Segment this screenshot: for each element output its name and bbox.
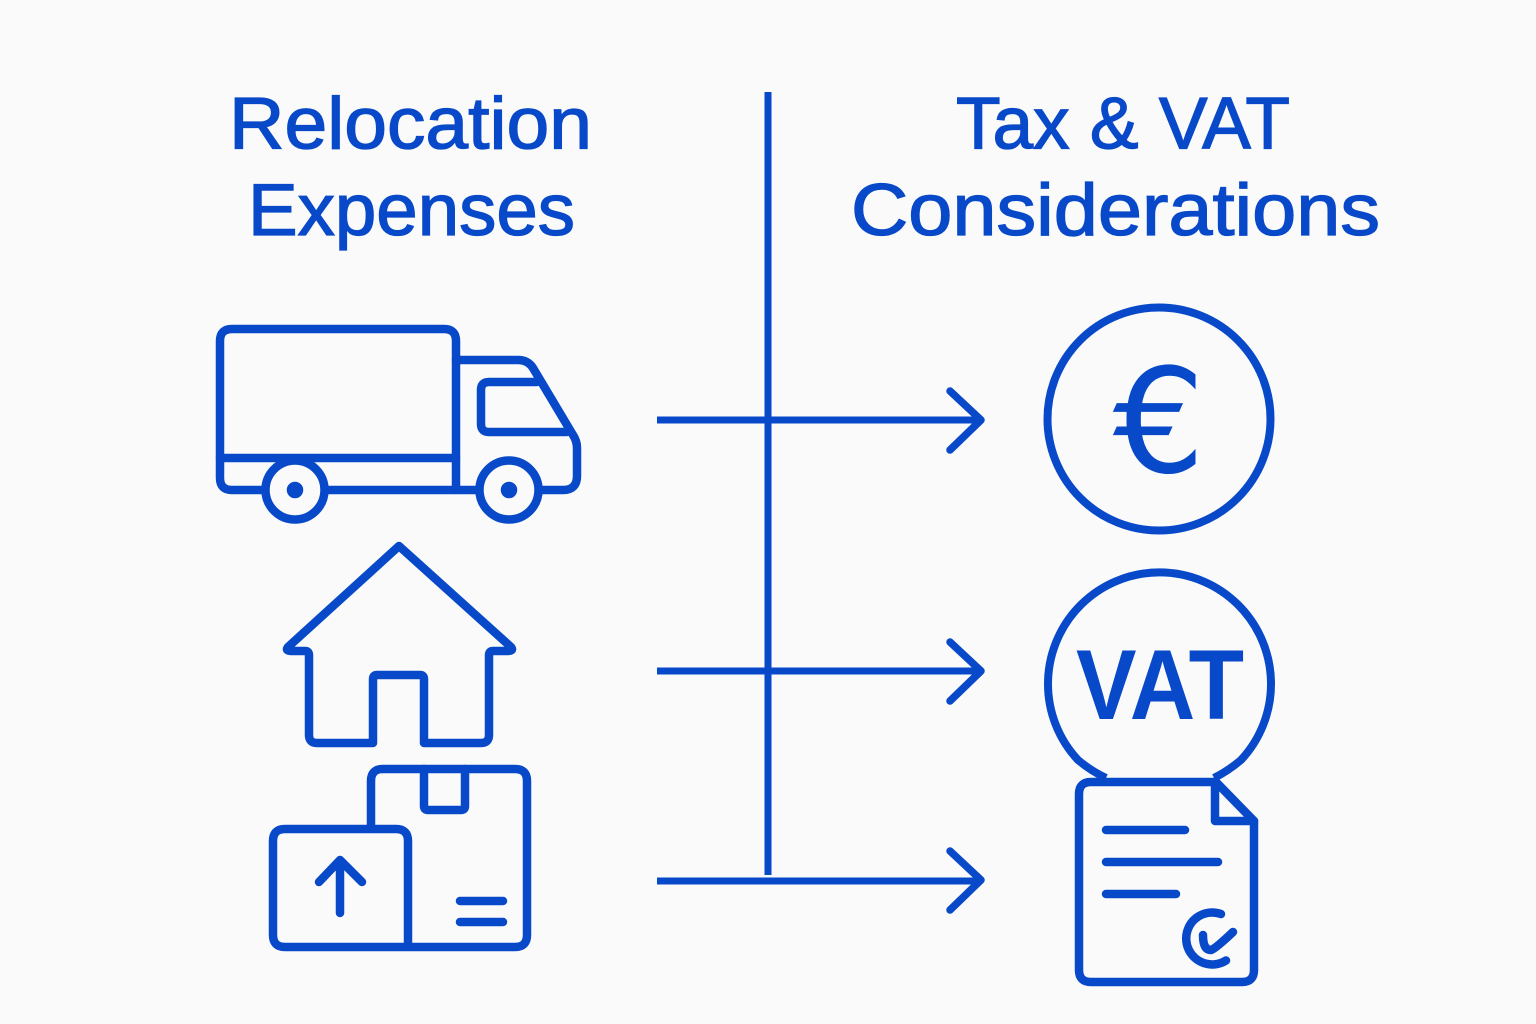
heading: Tax & VAT Considerations: Considerations — [851, 170, 1380, 251]
icon: moving truck — [220, 329, 577, 520]
icon: euro coin: € — [1113, 338, 1205, 507]
heading: Tax & VAT Considerations — [851, 84, 1380, 251]
icon: moving boxes — [273, 769, 527, 947]
icon: house — [287, 546, 512, 743]
vertical divider line — [764, 92, 772, 875]
heading: Relocation Expenses: Expenses — [248, 170, 575, 251]
icon: VAT circle: VAT — [1076, 629, 1244, 740]
icon: VAT circle — [1048, 572, 1271, 778]
icon: tax document — [1079, 782, 1254, 982]
heading: Relocation Expenses — [229, 84, 592, 251]
arrow: truck to euro — [657, 391, 981, 450]
heading: Tax & VAT Considerations: Tax & VAT — [956, 84, 1290, 164]
arrow: house to VAT — [657, 642, 981, 701]
heading: Relocation Expenses: Relocation — [229, 84, 592, 164]
icon: euro coin — [1048, 308, 1270, 530]
arrow: boxes to document — [657, 851, 981, 910]
